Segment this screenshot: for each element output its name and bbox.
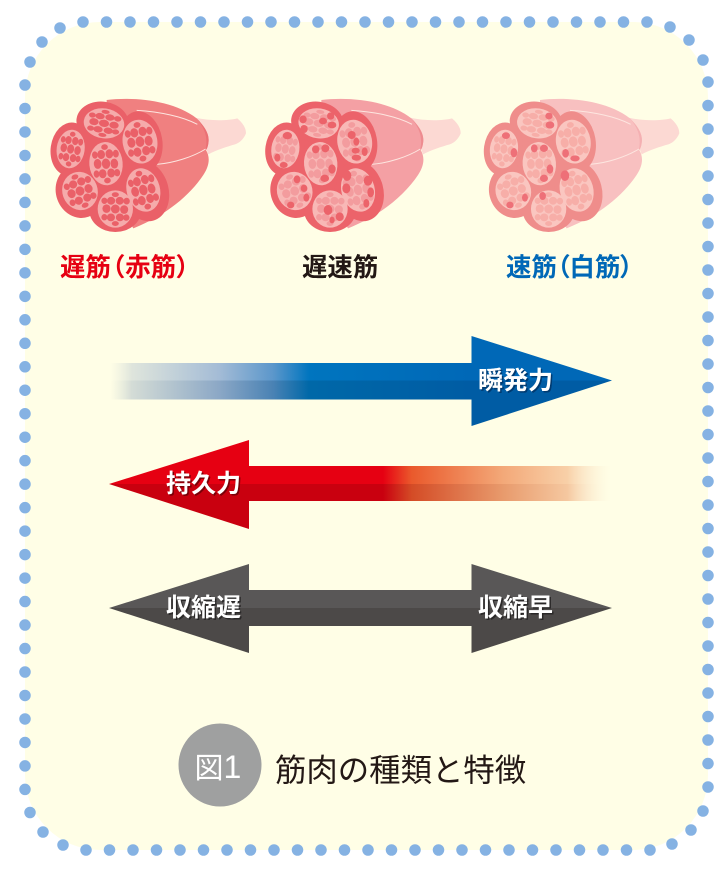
label: intermediate muscle: 遅速筋 <box>302 254 378 282</box>
arrow label: endurance: 持久力 <box>166 470 241 498</box>
arrow: explosive power (blue, right) <box>110 336 612 426</box>
badge text: figure 1: 図1 <box>194 748 241 784</box>
badge circle <box>178 724 262 806</box>
icon: white muscle <box>480 98 679 232</box>
icon: red muscle <box>47 98 246 232</box>
caption: 筋肉の種類と特徴 <box>275 753 526 788</box>
arrow: endurance (red, left) <box>109 440 611 529</box>
arrow label: fast contraction: 収縮早 <box>478 594 553 622</box>
label: fast-twitch muscle: 速筋（白筋） <box>506 254 633 282</box>
icon: intermediate muscle <box>262 98 461 232</box>
arrow label: slow contraction: 収縮遅 <box>166 594 241 622</box>
arrow label: explosive power: 瞬発力 <box>478 367 553 395</box>
arrow: contraction speed (gray, double) <box>109 564 612 653</box>
label: slow-twitch muscle: 遅筋（赤筋） <box>60 254 189 282</box>
